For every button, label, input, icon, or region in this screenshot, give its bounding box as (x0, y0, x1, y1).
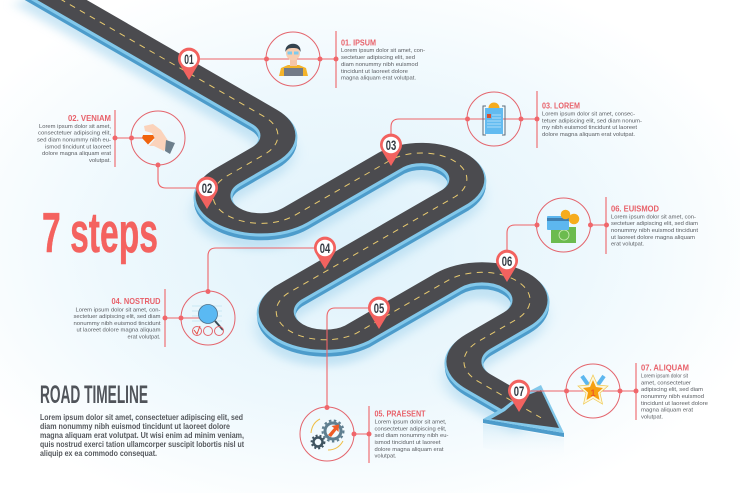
intro paragraph: magna aliquam erat volutpat. Ut wisi enim ad minim veniam, (40, 431, 244, 440)
label 01: diam nonummy nibh euismod (341, 62, 418, 68)
step 07 (528, 362, 709, 420)
label 07: volutpat. (641, 414, 663, 420)
label 04 (74, 296, 161, 340)
pin 04 (314, 237, 336, 269)
title: 7 steps: 7 steps (42, 201, 158, 265)
pin 06 (496, 250, 518, 282)
label 06: erat volutpat. (611, 242, 644, 248)
label 05: volutpat. (374, 454, 397, 460)
pin 03: 03 (386, 137, 396, 153)
label 03: my nibh euismod tincidunt ut laoreet (542, 125, 637, 131)
intro paragraph: aliquip ex ea commodo consequat. (40, 449, 157, 458)
label 06 (611, 204, 698, 248)
label 04: 04. NOSTRUD (112, 296, 160, 306)
icon: star medal: 1 (590, 388, 596, 398)
label 03: dolore magna aliquam erat volutpat. (542, 132, 635, 138)
pin 07 (508, 380, 530, 412)
pin 01: 01 (184, 51, 194, 67)
label 01: 01. IPSUM (341, 38, 376, 48)
label 04: Lorem ipsum dolor sit amet, con- (76, 308, 161, 314)
icon: hand holding gem (142, 124, 175, 154)
step 01 (199, 31, 425, 88)
pin 05 (368, 297, 390, 329)
label 06: 06. EUISMOD (611, 204, 659, 214)
label 03: tetuer adipiscing elit, sed diam nonum- (542, 118, 642, 124)
label 03 (542, 100, 642, 138)
pin 07: 07 (514, 383, 524, 399)
icon: card and coins (547, 210, 579, 243)
road (28, 0, 564, 462)
label 07: tincidunt ut laoreet dolore (641, 401, 709, 407)
label 03: 03. LOREM (542, 100, 580, 110)
heading: road timeline: ROAD TIMELINE (40, 381, 148, 409)
pin 02 (196, 177, 218, 209)
pin 05: 05 (374, 300, 384, 316)
intro paragraph: Lorem ipsum dolor sit amet, consectetuer adipiscing elit, sed (40, 413, 243, 422)
step 03 (391, 91, 642, 148)
pin 06: 06 (502, 253, 512, 269)
pin 03 (380, 134, 402, 166)
icon: star medal (578, 375, 608, 404)
icon: clipboard (483, 102, 505, 135)
label 02: volutpat. (89, 158, 111, 164)
intro paragraph: diam nonummy nibh euismod tincidunt ut laoreet dolore (40, 422, 230, 431)
icon: gears (311, 419, 344, 450)
label 04: erat volutpat. (128, 334, 161, 340)
step 04 (74, 248, 316, 347)
label 01: tincidunt ut laoreet dolore (341, 69, 409, 75)
pin 01 (178, 48, 200, 80)
label 06: sectetuer adipiscing elit, sed diam (611, 221, 698, 227)
label 07: nonummy nibh euismod (641, 394, 704, 400)
label 04: sectetuer adipiscing elit, sed diam (74, 314, 161, 320)
label 02: ismod tincidunt ut laoreet (45, 144, 111, 150)
label 03: Lorem ipsum dolor sit amet, consec- (542, 112, 635, 118)
pin 02: 02 (202, 180, 212, 196)
label 07: magna aliquam erat (641, 408, 693, 414)
label 07: 07. ALIQUAM (641, 362, 689, 372)
label 02 (37, 113, 111, 164)
label 07: adipiscing elit, sed diam (641, 387, 703, 393)
label 02: consectetuer adipiscing elit, (38, 130, 111, 136)
label 02: sed diam nonummy nibh eu- (37, 138, 111, 144)
label 06: nonummy nibh euismod tincidunt (611, 228, 698, 234)
label 06: Lorem ipsum dolor sit amet, con- (611, 214, 696, 220)
intro paragraph: quis nostrud exerci tation ullamcorper suscipit lobortis nisl ut (40, 440, 244, 449)
label 07: Lorem ipsum dolor sit (641, 374, 688, 380)
road arrow head (483, 385, 564, 437)
label 02: Lorem ipsum dolor sit amet, (39, 124, 111, 130)
label 05: consectetuer adipiscing elit, (374, 426, 447, 432)
step 05 (300, 308, 449, 463)
label 05: dolore magna aliquam erat (374, 447, 444, 453)
label 07: amet, consectetuer (641, 380, 691, 386)
label 02: 02. VENIAM (68, 113, 111, 123)
step 06 (507, 197, 698, 254)
icon: person at laptop (279, 44, 308, 76)
label 05: Lorem ipsum dolor sit amet, (374, 420, 447, 426)
intro paragraph (40, 413, 244, 458)
label 04: ut laoreet dolore magna aliquam (76, 328, 161, 334)
pin 04: 04 (320, 240, 330, 256)
label 04: nonummy nibh euismod tincidunt (74, 321, 161, 327)
label 07 (641, 362, 709, 420)
label 01: Lorem ipsum dolor sit amet, con- (341, 48, 425, 54)
step 02 (37, 110, 198, 188)
label 06: ut laoreet dolore magna aliquam (611, 235, 695, 241)
label 05: ismod tincidunt ut laoreet (374, 440, 441, 446)
label 05 (374, 408, 449, 460)
label 02: dolore magna aliquam erat (42, 151, 111, 157)
label 05: sed diam nonummy nibh eu- (374, 433, 449, 439)
label 05: 05. PRAESENT (374, 408, 426, 418)
icon: magnifier and checks (192, 304, 224, 336)
label 01 (341, 38, 425, 82)
label 01: magna aliquam erat volutpat. (341, 76, 416, 82)
label 01: sectetuer adipiscing elit, sed (341, 55, 415, 61)
